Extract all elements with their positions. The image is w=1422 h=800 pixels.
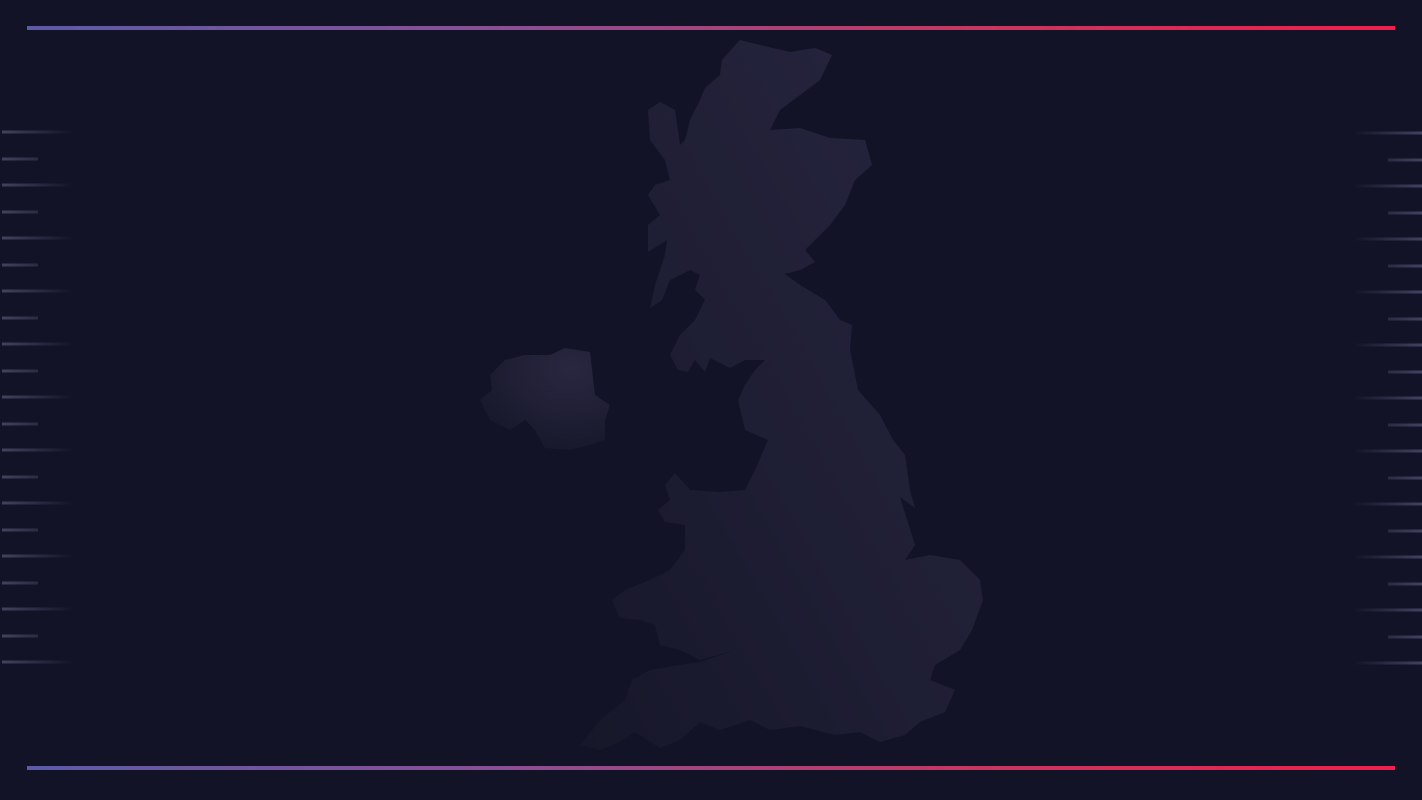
map: Great Britain bbox=[580, 40, 983, 750]
bottom gradient bar bbox=[27, 766, 1395, 770]
top gradient bar bbox=[27, 26, 1395, 30]
left side ticks bbox=[2, 132, 72, 662]
map: Northern Ireland bbox=[480, 348, 610, 450]
right side ticks bbox=[1355, 133, 1422, 663]
